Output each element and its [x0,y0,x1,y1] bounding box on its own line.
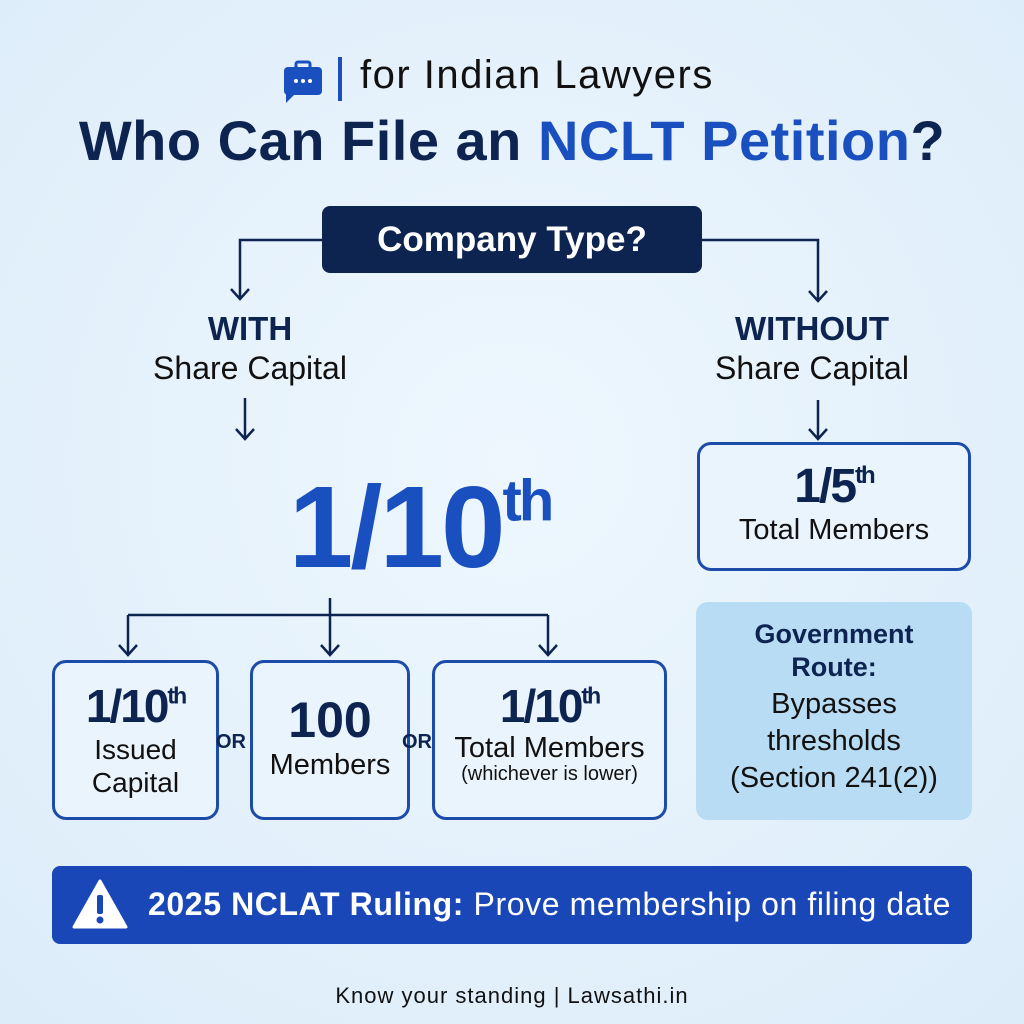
box: total members [432,660,667,820]
panel: government route: Government [754,619,914,649]
box: issued capital: 1/10th [86,680,185,732]
label: WITH share capital: Share Capital [153,350,347,386]
panel: government route [696,602,972,820]
big number 1/10th: 1/10th [289,462,551,592]
box: total members: Total Members [454,732,645,764]
label: WITHOUT share capital: WITHOUT [735,310,889,347]
panel: government route: (Section 241(2)) [730,762,938,794]
box: total members: (whichever is lower) [461,763,638,785]
header tagline: for Indian Lawyers [360,53,714,97]
box: issued capital: Issued [94,734,177,765]
banner: 2025 NCLAT ruling [52,866,972,944]
box: 100 members: Members [270,749,390,781]
label: WITH share capital [153,310,347,386]
question box: company type: Company Type? [377,220,647,259]
box: 1/5th total members: Total Members [739,514,929,546]
title: Who Can File an NCLT Petition? [79,109,945,172]
label: WITHOUT share capital [715,310,909,386]
label: WITH share capital: WITH [208,310,292,347]
box: total members: 1/10th [500,680,599,732]
OR 2: OR [402,731,432,753]
box: 1/5th total members: 1/5th [794,460,874,513]
question box: company type [322,206,702,273]
panel: government route: thresholds [767,725,901,757]
box: 1/5th total members [697,442,971,571]
box: issued capital: Capital [92,767,179,798]
banner: 2025 NCLAT ruling: 2025 NCLAT Ruling: Prove membership on filing date [148,886,951,922]
label: WITHOUT share capital: Share Capital [715,350,909,386]
OR 1: OR [216,731,246,753]
panel: government route: Route: [791,652,877,682]
box: 100 members: 100 [288,692,372,748]
icon: warning [72,879,128,928]
icon: briefcase chat [284,60,322,103]
box: 100 members [250,660,410,820]
footer: Know your standing | Lawsathi.in [335,983,689,1008]
panel: government route: Bypasses [771,688,897,720]
box: issued capital [52,660,219,820]
